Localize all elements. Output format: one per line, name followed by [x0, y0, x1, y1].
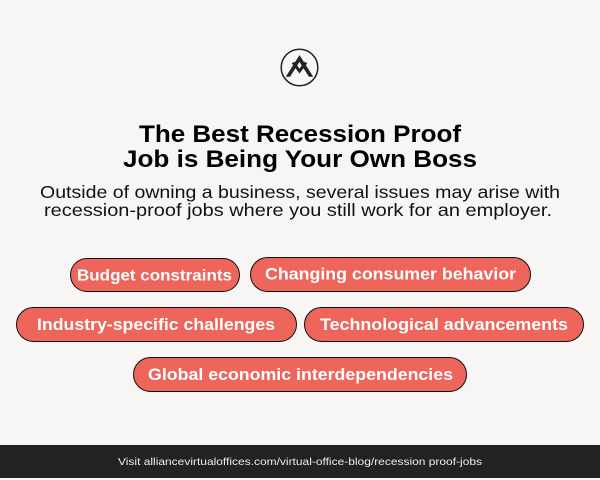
- subtitle text: [40, 182, 560, 220]
- pill: Global economic interdependencies: [134, 358, 466, 392]
- title: Job is Being Your Own Boss: [123, 146, 477, 173]
- pill: Changing consumer behavior: [250, 258, 530, 292]
- pill: Technological advancements: Technological advancements: [320, 316, 568, 334]
- pill: Changing consumer behavior: Changing consumer behavior: [265, 266, 517, 284]
- icon: mountain logo: [281, 49, 318, 86]
- footer bar: Visit alliancevirtualoffices.com/virtual-office-blog/recession proof-jobs: [118, 456, 482, 468]
- subtitle text: Outside of owning a business, several issues may arise with: [40, 182, 560, 202]
- title: [123, 121, 477, 173]
- footer bar: [0, 445, 600, 478]
- pill: Industry-specific challenges: Industry-specific challenges: [37, 316, 275, 334]
- pill: Industry-specific challenges: [16, 308, 296, 342]
- pill: Budget constraints: Budget constraints: [77, 268, 232, 284]
- subtitle text: recession-proof jobs where you still work for an employer.: [44, 200, 552, 220]
- pill: Budget constraints: [70, 258, 240, 292]
- pill: Global economic interdependencies: Global economic interdependencies: [148, 366, 453, 384]
- pill: Technological advancements: [304, 308, 584, 342]
- title: The Best Recession Proof: [139, 121, 462, 148]
